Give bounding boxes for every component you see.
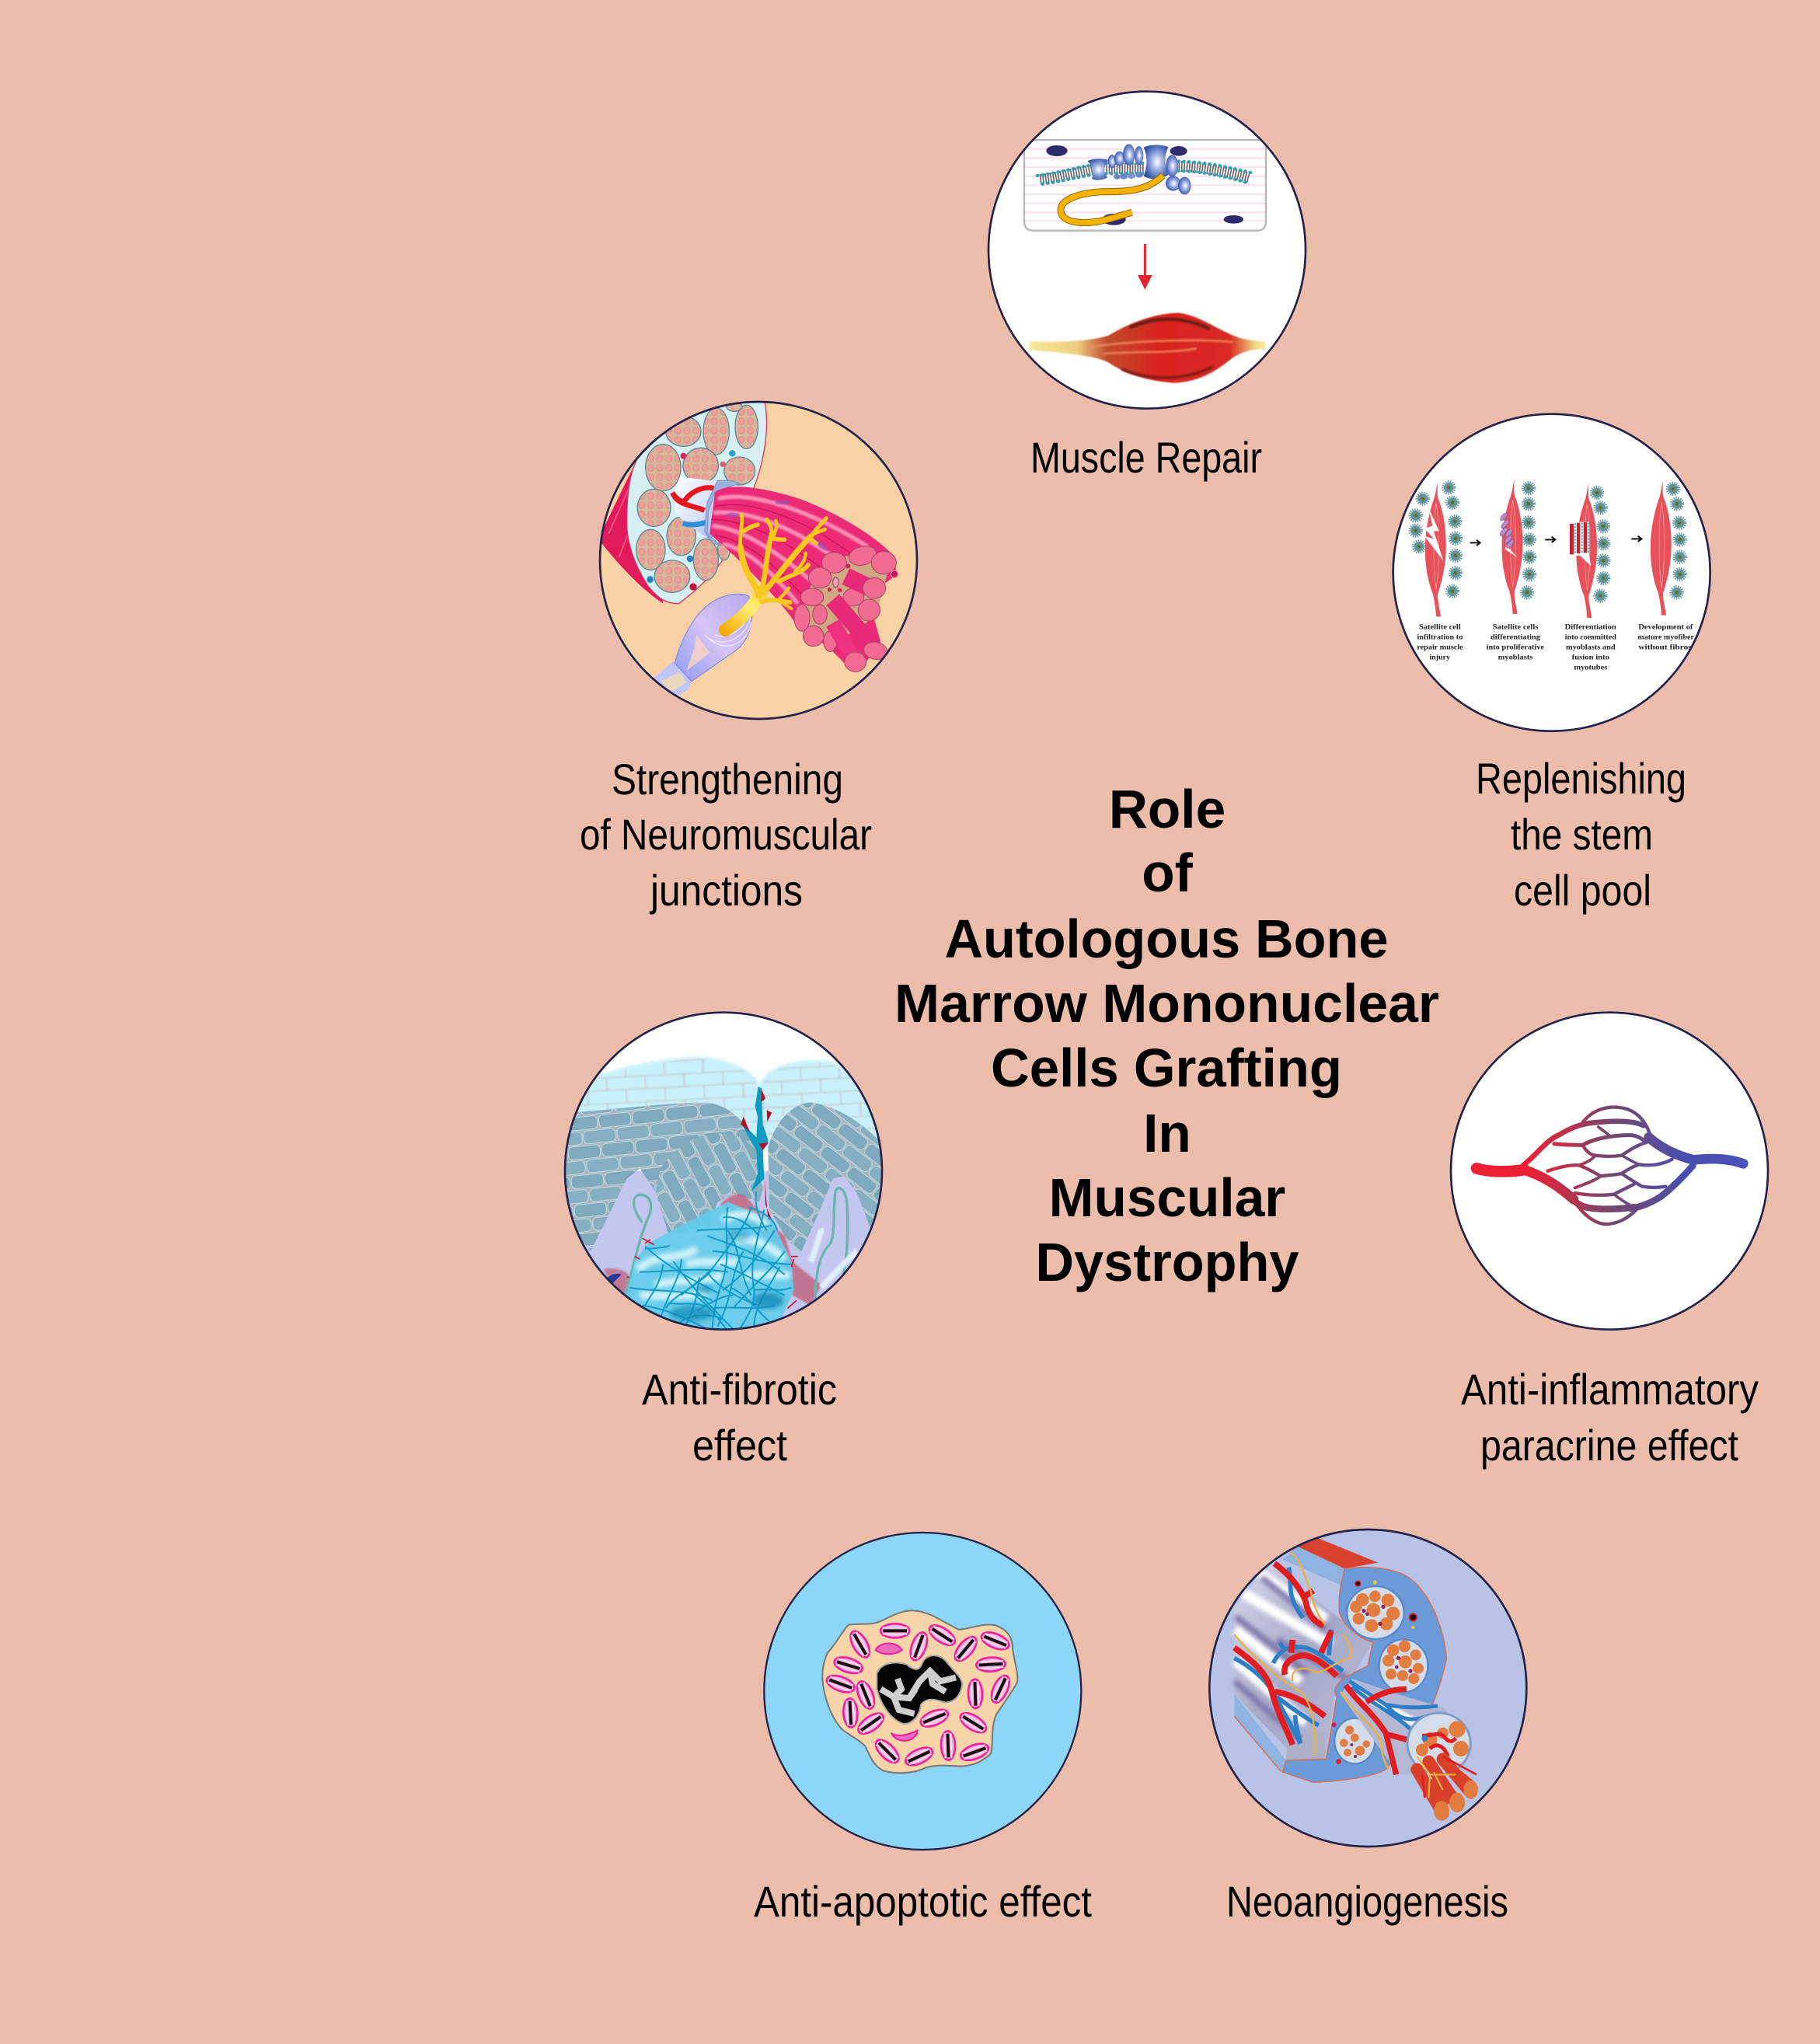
title: Cells Grafting — [991, 1038, 1342, 1098]
icon: myofiber box with dystrophin complex — [1024, 140, 1266, 231]
panel: strengthening of neuromuscular junctions — [598, 399, 917, 719]
label: Replenishing the stem cell pool: the stem — [1511, 810, 1653, 859]
panel: anti-fibrotic effect — [562, 1013, 886, 1339]
icon: collagen fibres — [627, 1191, 794, 1334]
label: Anti-inflammatory paracrine effect: paracrine effect — [1480, 1421, 1738, 1470]
text: step captions: without fibrosis — [1638, 644, 1698, 651]
text: step captions — [1417, 623, 1698, 671]
icon: yellow nerve terminal — [725, 514, 826, 630]
title: of — [1142, 842, 1194, 903]
panel: anti-inflammatory paracrine effect — [1451, 1013, 1768, 1330]
label: Replenishing the stem cell pool: cell pool — [1514, 866, 1651, 915]
icon: muscle sheath — [1234, 1538, 1447, 1782]
text: step captions: injury — [1429, 654, 1450, 661]
title: In — [1143, 1103, 1191, 1163]
label: Strengthening of Neuromuscular junctions: junctions — [649, 866, 803, 915]
icon: muscle fibre bundle — [710, 487, 898, 671]
text: step captions: myotubes — [1574, 664, 1608, 671]
title — [894, 779, 1439, 1292]
text: step captions: myoblasts — [1498, 654, 1533, 661]
text: step captions: into committed — [1565, 633, 1617, 641]
icon: epidermis layers — [562, 1058, 886, 1306]
icon: satellite cells — [1410, 483, 1685, 601]
label: Anti-inflammatory paracrine effect — [1461, 1365, 1759, 1470]
text: step captions: Satellite cells — [1493, 623, 1539, 631]
icon: capillary network — [1477, 1107, 1743, 1224]
icon: Schwann cell sheath — [653, 594, 752, 696]
title: Muscular — [1049, 1167, 1285, 1228]
text: step captions: Development of — [1638, 623, 1693, 631]
icon: red capillary marks — [627, 1238, 798, 1308]
label: Strengthening of Neuromuscular junctions — [580, 755, 872, 915]
title: Marrow Mononuclear — [894, 973, 1439, 1034]
text: step captions: differentiating — [1491, 633, 1540, 641]
icon: injuries and differentiating cells — [1424, 508, 1591, 566]
text: step captions: myoblasts and — [1566, 644, 1616, 651]
label: Replenishing the stem cell pool: Replenishing — [1476, 754, 1686, 803]
text: step captions: into proliferative — [1487, 644, 1544, 651]
icon: nucleus — [877, 1655, 962, 1724]
icon: front fascicle bundle — [1407, 1713, 1478, 1821]
panel: neoangiogenesis — [1209, 1530, 1526, 1847]
label: Neoangiogenesis: Neoangiogenesis — [1226, 1877, 1508, 1926]
label: Replenishing the stem cell pool — [1476, 754, 1686, 915]
arrow: red — [1138, 244, 1152, 290]
icon: fascicle sections — [1332, 1580, 1428, 1764]
panel: anti-apoptotic effect — [764, 1533, 1081, 1850]
icon: wound crack — [741, 1087, 773, 1223]
label: Strengthening of Neuromuscular junctions: Strengthening — [612, 755, 843, 804]
label: Anti-fibrotic effect: Anti-fibrotic — [642, 1365, 837, 1414]
icon: funnel with vessels — [672, 476, 740, 546]
arrows: process steps — [1470, 536, 1641, 546]
label: Muscle Repair: Muscle Repair — [1030, 433, 1262, 482]
label: Anti-inflammatory paracrine effect: Anti-inflammatory — [1461, 1365, 1759, 1414]
text: step captions: mature myofiber — [1637, 633, 1694, 641]
icon: blood vessels and nerves — [1234, 1552, 1456, 1774]
panel: replenishing the stem cell pool — [1393, 414, 1710, 731]
icon: muscle fibres — [1425, 480, 1672, 618]
icon: muscle cross-section — [598, 399, 898, 696]
icon: hair loops — [626, 1188, 857, 1303]
label: Anti-fibrotic effect: effect — [692, 1421, 787, 1470]
text: step captions: Satellite cell — [1419, 623, 1461, 631]
text: step captions: repair muscle — [1417, 644, 1463, 651]
panel: muscle repair — [988, 92, 1306, 409]
text: step captions: infiltration to — [1417, 633, 1463, 641]
text: step captions: Differentiation — [1565, 623, 1617, 631]
label: Strengthening of Neuromuscular junctions: of Neuromuscular — [580, 810, 872, 859]
text: step captions: fusion into — [1572, 654, 1609, 661]
label: Anti-fibrotic effect — [642, 1365, 837, 1470]
label: Anti-apoptotic effect: Anti-apoptotic effect — [754, 1877, 1092, 1926]
title: Dystrophy — [1035, 1232, 1299, 1292]
title: Role — [1109, 779, 1226, 839]
icon: repaired muscle — [1030, 313, 1265, 383]
title: Autologous Bone — [945, 909, 1388, 969]
icon: cell with mitochondria — [822, 1610, 1017, 1773]
